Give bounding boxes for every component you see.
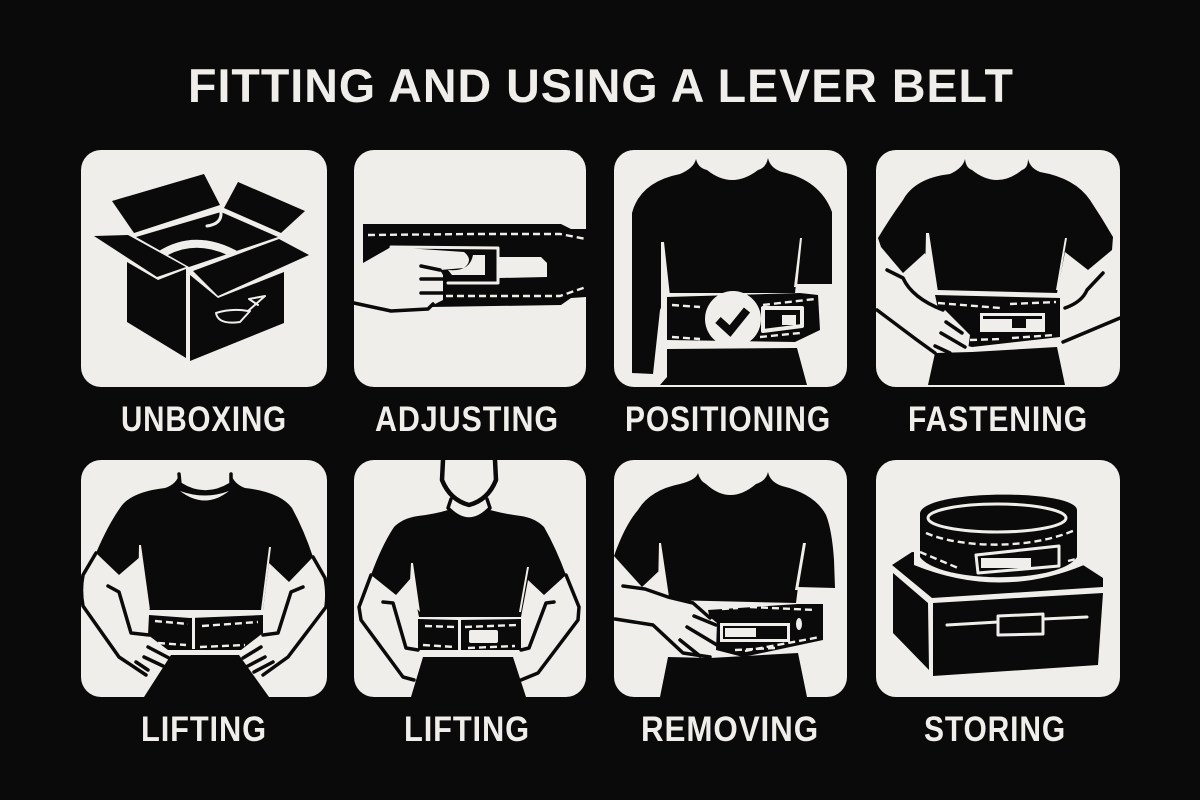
icon: torso hands on belt <box>82 474 327 697</box>
label: positioning: POSITIONING <box>625 400 831 439</box>
icon: open box <box>94 174 309 361</box>
label: unboxing: UNBOXING <box>121 400 287 439</box>
label: storing: STORING <box>924 710 1066 749</box>
panel: lifting 2 <box>354 460 586 749</box>
label: lifting: LIFTING <box>141 710 267 749</box>
panel: unboxing <box>81 150 327 439</box>
icon: torso fastening belt <box>877 159 1120 385</box>
title: FITTING AND USING A LEVER BELT <box>188 59 1014 112</box>
panel: lifting 1 <box>81 460 327 749</box>
label: adjusting: ADJUSTING <box>375 400 559 439</box>
panel: fastening <box>876 150 1120 439</box>
label: removing: REMOVING <box>641 710 819 749</box>
panel: storing <box>876 460 1120 749</box>
icon: belt and hand <box>354 224 586 311</box>
icon: figure with head and belt <box>359 460 579 697</box>
label: lifting: LIFTING <box>404 710 530 749</box>
icon: belt on box <box>892 495 1103 676</box>
panel: removing <box>614 460 847 749</box>
icon: torso removing belt <box>614 472 835 697</box>
label: fastening: FASTENING <box>908 400 1088 439</box>
panel: positioning <box>614 150 847 439</box>
icon: torso with belt and check <box>632 158 832 385</box>
panel: adjusting <box>354 150 586 439</box>
